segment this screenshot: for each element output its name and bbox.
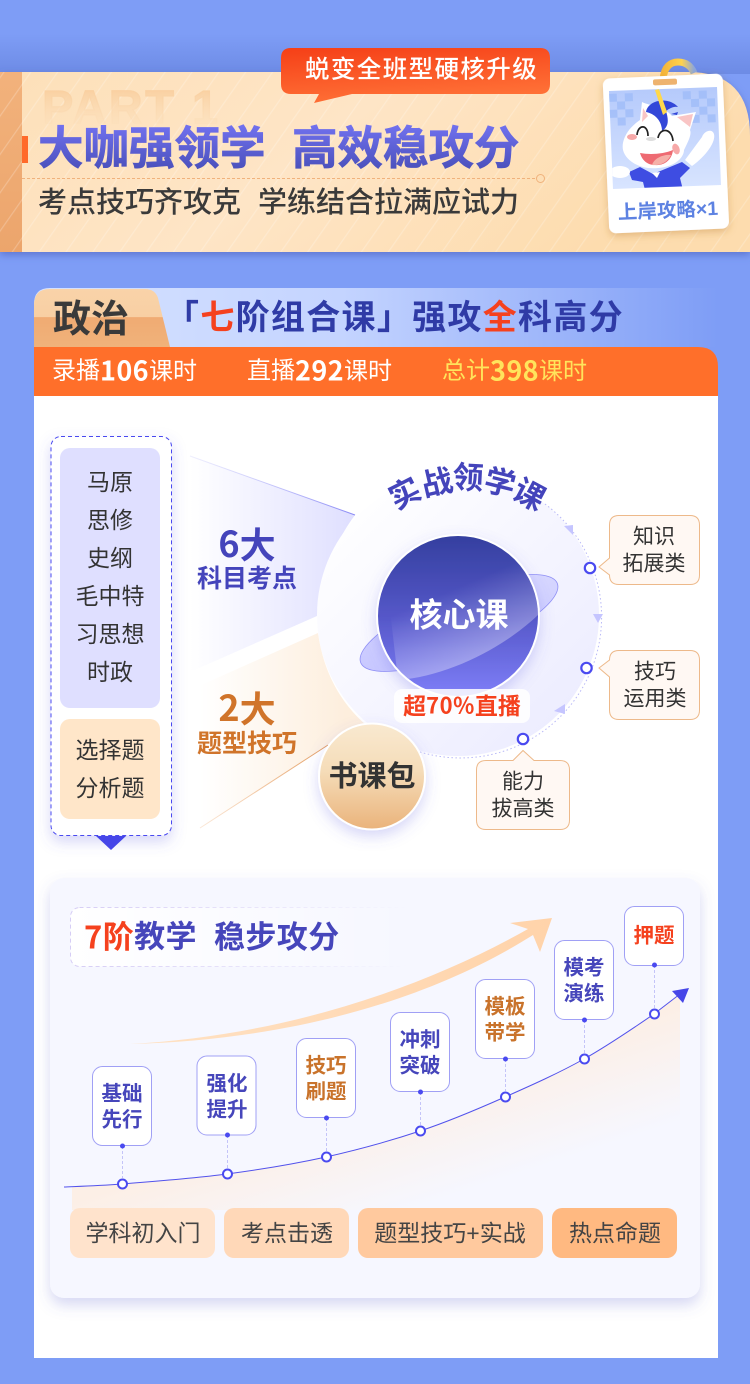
card body (34, 396, 718, 1358)
subject block: 时政 (87, 659, 133, 685)
stage: mock exam: 模考 (564, 956, 604, 980)
label: 2 skills: 大 (240, 688, 276, 730)
stage: strengthen: 强化 (206, 1072, 248, 1096)
callout: skill application: 运用类 (624, 688, 686, 710)
planet sphere (377, 535, 545, 697)
stage: sprint: 突破 (400, 1054, 440, 1078)
subject name: 政治 (53, 299, 129, 341)
icon: mascot badge card (603, 62, 729, 234)
callout: ability boost: 能力 (502, 770, 544, 794)
subject block: 习思想 (76, 621, 144, 647)
cheeks (627, 134, 637, 140)
stage heading: 教学 (134, 920, 197, 954)
callout: knowledge extension: 拓展类 (622, 552, 686, 576)
pill: beginner: 学科初入门 (86, 1220, 200, 1246)
live share badge: 70% (426, 688, 475, 720)
stage heading: 阶 (103, 920, 134, 954)
label: question skills: 题型技巧 (197, 730, 297, 758)
wedge: subject points (190, 456, 355, 672)
recorded hours: 106 (100, 349, 149, 388)
curved label: 战 (418, 462, 456, 504)
pill: hot topics (552, 1208, 677, 1258)
pill: beginner (70, 1208, 215, 1258)
recorded hours: 录播 (52, 358, 100, 384)
nose (646, 137, 656, 141)
total hours: 398 (490, 349, 539, 388)
stage: skill drills (296, 1038, 356, 1162)
left hand (610, 166, 630, 178)
total hours: 课时 (539, 358, 587, 384)
stage: template learning: 模板 (484, 996, 526, 1018)
divider dashed line (22, 174, 544, 182)
orbit nodes (518, 563, 595, 744)
mascot picture (609, 87, 721, 189)
subject block (60, 448, 160, 708)
banner top shadow (0, 34, 750, 74)
live hours: 课时 (344, 358, 392, 384)
accent mark (22, 136, 28, 163)
subject block: 毛中特 (76, 583, 144, 609)
horn (655, 89, 667, 115)
question type block (60, 719, 160, 819)
banner title: 高效稳攻分 (292, 122, 520, 174)
section title: 「七阶组合课」强攻全科高分 (165, 299, 624, 337)
growth curve chart (64, 988, 689, 1210)
book package circle: 书课包 (328, 760, 416, 793)
callout: skill application: 技巧 (634, 660, 676, 684)
curved label: 学 (481, 462, 519, 504)
stage: foundation: 基础 (102, 1082, 142, 1106)
curve arrowhead (672, 988, 689, 1003)
live share badge: 直播 (475, 693, 521, 719)
pill: key points: 考点击透 (241, 1220, 333, 1246)
callout: ability boost: 拔高类 (492, 798, 554, 820)
core course label: 核心课 (410, 596, 508, 634)
stage: template learning (476, 980, 534, 1102)
curved label (383, 460, 551, 518)
stage: strengthen (197, 1056, 256, 1178)
live hours: 直播 (247, 358, 295, 384)
label: subject points: 科目考点 (197, 565, 297, 593)
panel: politics course card (34, 288, 718, 1358)
callout: knowledge extension: 知识 (633, 526, 675, 548)
hair (646, 101, 678, 131)
body (629, 162, 690, 190)
stage heading (70, 908, 410, 966)
pill: skills and practice: 题型技巧+实战 (374, 1220, 526, 1246)
label: 6 subjects: 6 (218, 516, 240, 568)
card (603, 73, 729, 234)
chart: core course orbit (317, 460, 603, 758)
pill: skills and practice (358, 1208, 543, 1258)
panel: part banner (0, 72, 750, 252)
head (623, 102, 696, 168)
panel: subject list (51, 436, 172, 850)
question type block: 分析题 (76, 775, 144, 801)
banner subtitle: 考点技巧齐攻克 (38, 186, 241, 219)
label: 6 subjects: 大 (240, 524, 276, 566)
stage heading: 7 (84, 912, 103, 957)
ears inner (642, 108, 648, 122)
curved label: 课 (507, 472, 551, 518)
mouth (640, 150, 673, 165)
banner subtitle: 学练结合拉满应试力 (258, 186, 519, 219)
stage: foundation (92, 1066, 152, 1188)
stage: sprint: 冲刺 (400, 1028, 440, 1052)
part number watermark: PART 1 (42, 80, 221, 134)
stage: sprint (390, 1012, 450, 1136)
total hours: 总计 (442, 358, 490, 384)
stage: predicted questions (624, 906, 684, 1018)
panel: seven stage teaching (50, 878, 700, 1298)
pointer triangle (96, 836, 126, 850)
pill: hot topics: 热点命题 (569, 1220, 661, 1246)
subject block: 思修 (87, 507, 133, 533)
stage: mock exam: 演练 (564, 982, 604, 1006)
stage heading: 稳步攻分 (214, 920, 340, 954)
wedge: question skills (190, 633, 366, 828)
callout: ability boost (476, 750, 570, 830)
question type block: 选择题 (76, 737, 144, 763)
subject block: 史纲 (87, 545, 133, 571)
callout: upgrade speech bubble: 蜕变全班型硬核升级 (305, 56, 538, 84)
arrow: growth trend (130, 918, 552, 1044)
subject block: 马原 (87, 469, 133, 495)
eyes (637, 127, 648, 136)
stage: skill drills: 刷题 (306, 1080, 346, 1104)
card caption: 上岸攻略×1 (617, 197, 719, 224)
pill: key points (224, 1208, 349, 1258)
live share badge (394, 688, 530, 723)
callout: skill application (599, 650, 700, 720)
hook base (653, 79, 677, 85)
stage: mock exam (554, 940, 614, 1064)
label: 2 skills: 2 (218, 680, 240, 732)
callout: knowledge extension (599, 516, 700, 584)
recorded hours: 课时 (149, 358, 197, 384)
curved label: 领 (452, 460, 484, 496)
raised arm (685, 131, 714, 166)
callout: upgrade speech bubble (281, 48, 550, 103)
hours bar (34, 347, 718, 396)
stage: foundation: 先行 (102, 1108, 142, 1132)
live share badge: 超 (403, 693, 426, 719)
stage: template learning: 带学 (484, 1020, 526, 1044)
orbit arrowheads (554, 525, 603, 714)
stage: strengthen: 提升 (206, 1098, 248, 1122)
section header strip (34, 288, 718, 347)
live hours: 292 (295, 349, 344, 388)
book package circle (319, 724, 425, 830)
subject tab (34, 289, 170, 347)
curved label: 实 (383, 471, 427, 517)
hook (663, 62, 694, 80)
stage: predicted questions: 押题 (634, 924, 674, 948)
stage: skill drills: 技巧 (306, 1054, 346, 1078)
planet ring (349, 555, 569, 691)
banner title: 大咖强领学 (38, 122, 266, 174)
